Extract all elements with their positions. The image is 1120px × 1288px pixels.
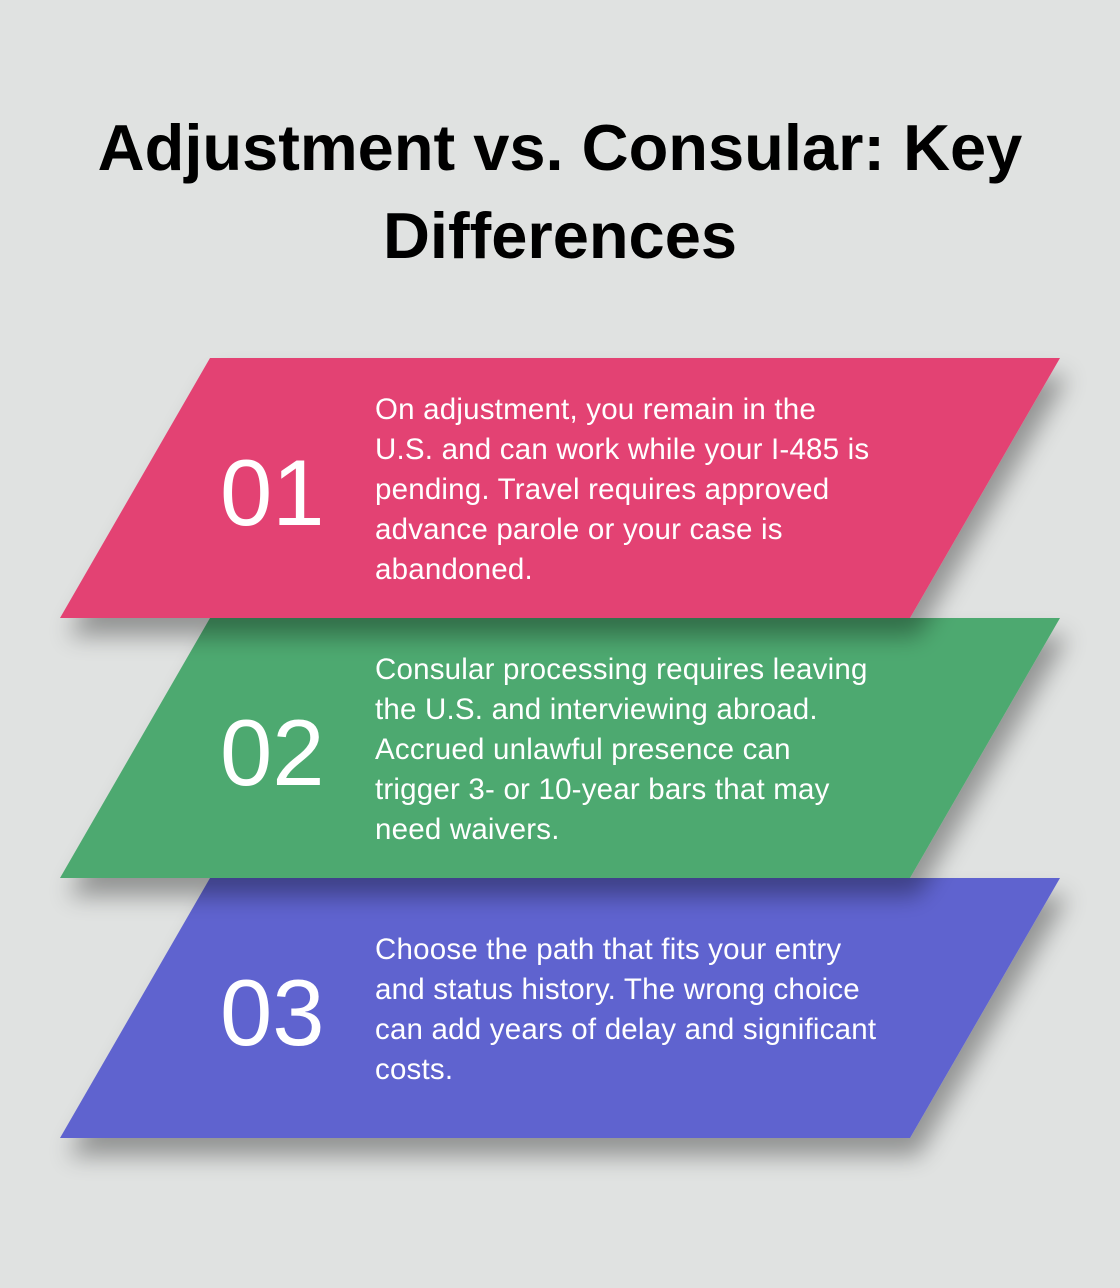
panel 1 shape: [60, 358, 1060, 618]
text 1: advance parole or your case is: [375, 513, 783, 546]
text 1: On adjustment, you remain in the: [375, 393, 816, 426]
panel 2: [220, 653, 868, 846]
panel 2 shape: [60, 618, 1060, 878]
panel 3 shape: [60, 878, 1060, 1138]
text 1: pending. Travel requires approved: [375, 473, 829, 506]
panel 1: [220, 393, 869, 586]
text 3: [375, 933, 876, 1086]
title: [98, 111, 1022, 272]
text 3: can add years of delay and significant: [375, 1013, 876, 1046]
title: Adjustment vs. Consular: Key: [98, 111, 1022, 184]
text 3: and status history. The wrong choice: [375, 973, 860, 1006]
text 1: abandoned.: [375, 553, 533, 586]
text 1: [375, 393, 869, 586]
text 2: need waivers.: [375, 813, 560, 846]
number 03: 03: [220, 960, 325, 1065]
text 2: Accrued unlawful presence can: [375, 733, 791, 766]
text 2: trigger 3- or 10-year bars that may: [375, 773, 830, 806]
text 3: costs.: [375, 1053, 453, 1086]
text 3: Choose the path that fits your entry: [375, 933, 841, 966]
panel 3: [220, 933, 876, 1086]
text 2: [375, 653, 868, 846]
text 2: the U.S. and interviewing abroad.: [375, 693, 818, 726]
number 01: 01: [220, 440, 325, 545]
number 02: 02: [220, 700, 325, 805]
text 2: Consular processing requires leaving: [375, 653, 868, 686]
text 1: U.S. and can work while your I-485 is: [375, 433, 869, 466]
title: Differences: [383, 199, 737, 272]
